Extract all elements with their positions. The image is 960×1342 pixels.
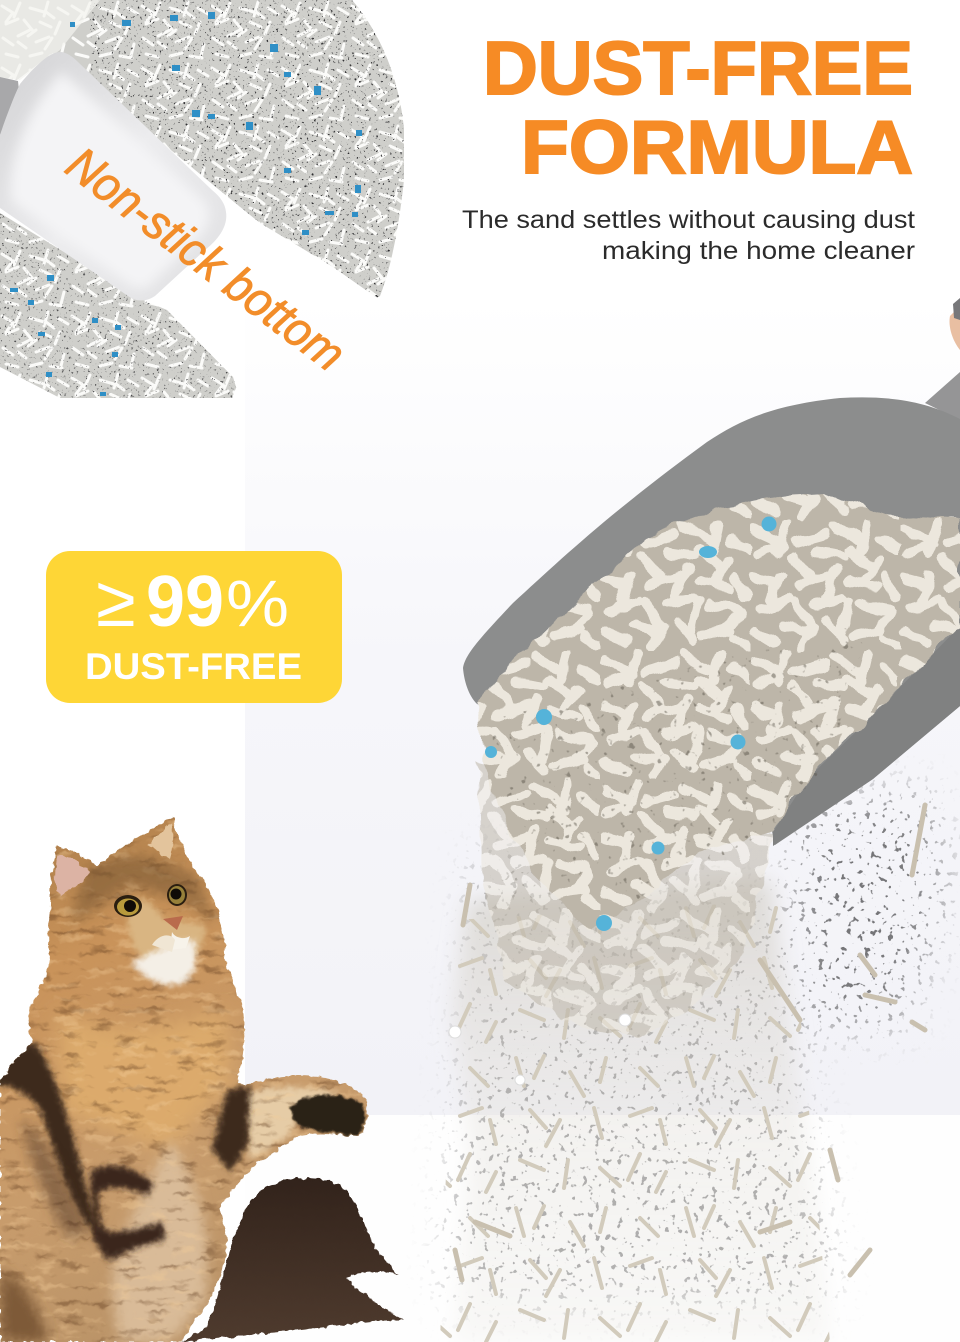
back stripe — [0, 1042, 102, 1240]
cat right ear inner — [148, 822, 173, 860]
dense stream below scoop — [478, 760, 775, 1040]
loose sticks — [455, 805, 925, 1280]
badge: 99% dust-free: % — [226, 566, 289, 640]
inner side stripe — [22, 1120, 90, 1240]
cat — [0, 815, 403, 1342]
subtitle text — [462, 206, 915, 265]
cat face — [114, 884, 190, 952]
scoop body — [463, 397, 960, 845]
light lower body — [112, 1140, 207, 1342]
chest stripes — [90, 1166, 165, 1262]
badge: 99% dust-free: 99 — [146, 562, 224, 642]
muzzle — [128, 898, 205, 968]
badge: 99% dust-free: ≥ — [96, 562, 136, 642]
cat body fur — [0, 815, 370, 1342]
white inset scoop — [0, 52, 226, 300]
arm stripe — [212, 1084, 250, 1172]
cat silhouette — [0, 817, 367, 1342]
gray dust cloud right of stream — [790, 790, 945, 1030]
shadow gaps in pile — [490, 620, 870, 900]
cat tail — [180, 1178, 403, 1342]
light chest fluff — [60, 1010, 230, 1150]
subtitle text: making the home cleaner — [602, 237, 915, 265]
lower side shading — [0, 1270, 50, 1342]
title — [483, 26, 913, 189]
inset photo: litter and white scoop — [0, 0, 404, 400]
gray dust in lower stream — [450, 850, 830, 1300]
litter pile in scoop — [477, 493, 960, 931]
cat markings — [0, 815, 370, 1342]
blue pellets — [485, 516, 776, 931]
scoop handle — [925, 298, 960, 420]
gray litter scoop — [463, 298, 960, 846]
litter in inset — [0, 0, 404, 400]
inset label: Non-stick bottom — [56, 138, 354, 382]
paw light fur — [245, 1087, 340, 1160]
white chin and chest — [132, 940, 196, 985]
cat ear inner — [55, 855, 90, 897]
tan sticks in lower stream — [440, 900, 830, 1342]
fur noise light — [0, 815, 370, 1342]
badge: 99% dust-free — [46, 551, 342, 703]
head shade — [70, 856, 215, 925]
title: DUST-FREE — [483, 26, 913, 110]
fur noise dark — [0, 815, 370, 1342]
badge: 99% dust-free: DUST-FREE — [85, 646, 302, 687]
subtitle text: The sand settles without causing dust — [462, 206, 915, 234]
paw dark — [290, 1095, 365, 1136]
haze behind lower stream — [452, 880, 830, 1342]
scoop front lip — [773, 626, 960, 846]
title: FORMULA — [521, 105, 913, 189]
white pellets — [449, 1014, 631, 1085]
falling litter stream — [440, 760, 945, 1342]
